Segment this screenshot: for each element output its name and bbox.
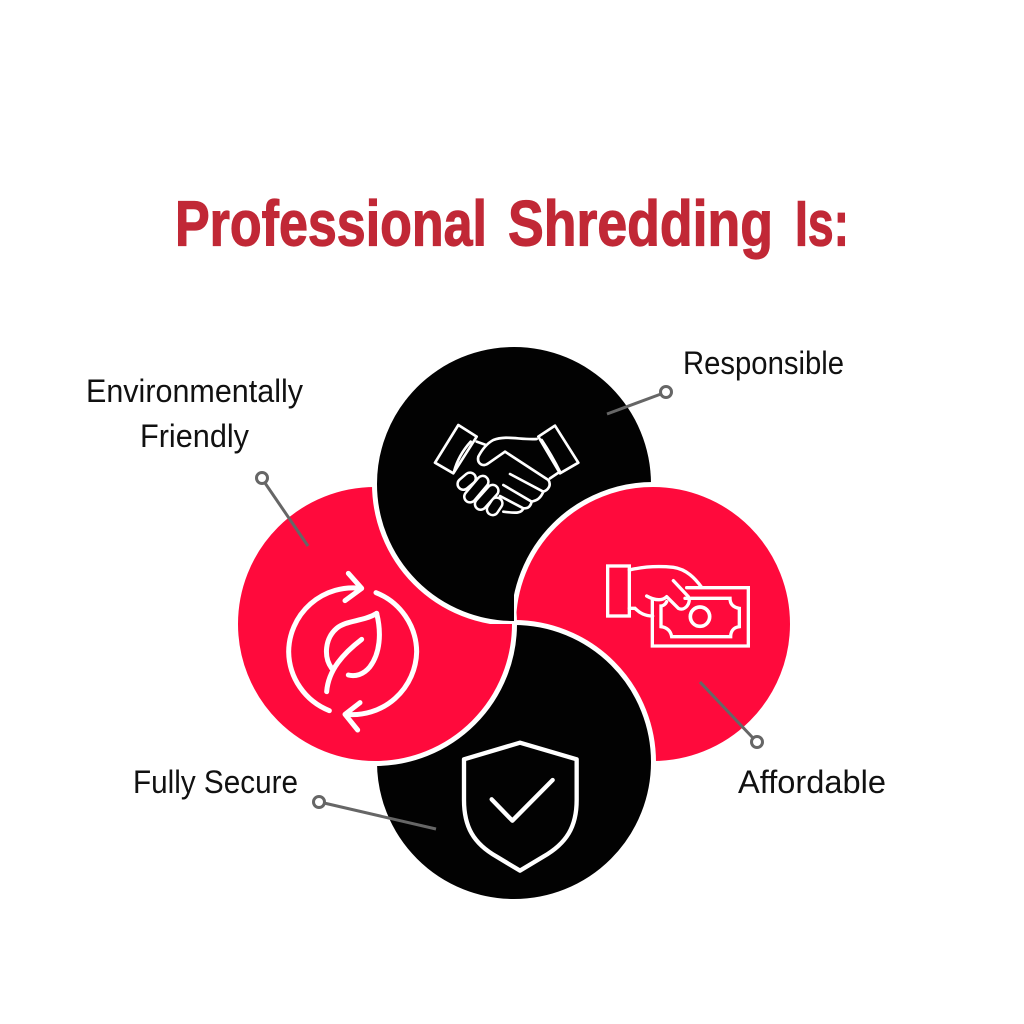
label: fully secure: Fully Secure <box>133 764 298 800</box>
icon: shield with check <box>464 743 577 871</box>
icon: hand with banknote <box>608 566 748 646</box>
circle: environmentally friendly (left red) <box>236 484 514 764</box>
circle: affordable (right red) <box>514 484 792 764</box>
label: environmentally friendly: Friendly <box>140 418 249 454</box>
label: responsible: Responsible <box>683 345 844 381</box>
circle: responsible (top black) <box>377 347 651 621</box>
title: Professional <box>175 188 487 260</box>
title: Shredding <box>508 188 773 260</box>
overlap: top black over left red <box>372 400 514 624</box>
title: Is: <box>795 188 849 260</box>
label: environmentally friendly: Environmentally <box>86 373 303 409</box>
title <box>175 188 849 260</box>
circle: fully secure (bottom black) <box>374 622 654 902</box>
leader line: environmentally friendly <box>256 472 308 546</box>
icon: leaf in recycling arrows <box>289 573 417 730</box>
leader line: affordable <box>700 682 762 748</box>
leader line: responsible <box>607 386 672 414</box>
panel: interlocking circles <box>236 344 792 902</box>
label: affordable: Affordable <box>738 764 886 800</box>
icon: handshake <box>435 425 578 513</box>
label: environmentally friendly <box>86 373 303 454</box>
leader line: fully secure <box>314 796 436 829</box>
